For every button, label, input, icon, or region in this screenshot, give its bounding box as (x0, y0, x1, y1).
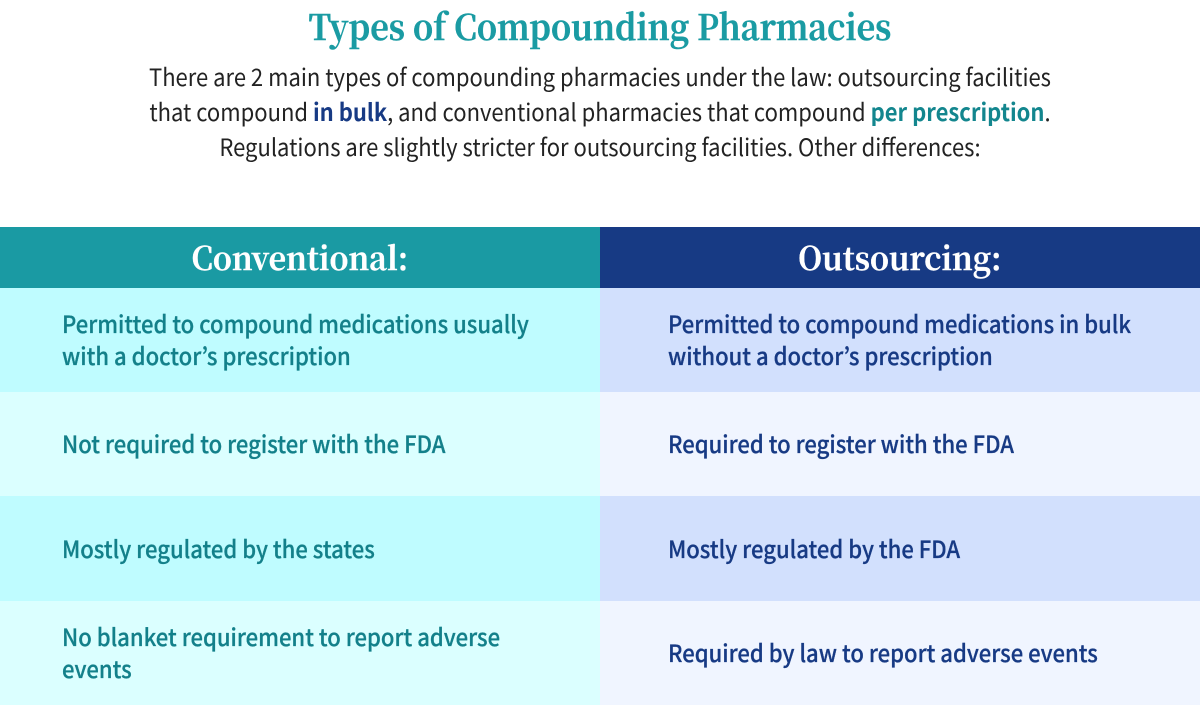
column heading: Conventional: Conventional: (192, 234, 408, 280)
row 3 conventional (0, 496, 600, 601)
row 1 outsourcing: Permitted to compound medications in bulk (668, 305, 1131, 340)
intro text: There are 2 main types of compounding pharmacies under the law: outsourcing facilities (149, 58, 1051, 93)
row 4 conventional (0, 601, 600, 705)
column heading: Outsourcing (600, 227, 1200, 288)
column heading: Outsourcing: Outsourcing: (798, 234, 1002, 280)
row 1 conventional: with a doctor’s prescription (62, 337, 351, 372)
row 2 outsourcing (600, 392, 1200, 496)
row 4 conventional: No blanket requirement to report adverse (62, 618, 500, 653)
row 3 outsourcing: Mostly regulated by the FDA (668, 530, 960, 565)
row 4 conventional: events (62, 650, 132, 685)
intro text: that compound in bulk, and conventional pharmacies that compound per prescription. (149, 93, 1051, 128)
row 4 outsourcing (600, 601, 1200, 705)
row 2 outsourcing: Required to register with the FDA (668, 425, 1014, 460)
row 2 conventional: Not required to register with the FDA (62, 425, 445, 460)
intro text: Regulations are slightly stricter for outsourcing facilities. Other differences: (219, 128, 981, 163)
row 3 outsourcing (600, 496, 1200, 601)
intro text (149, 58, 1051, 163)
column heading: Conventional (0, 227, 600, 288)
title: Types of Compounding Pharmacies (309, 1, 891, 51)
row 1 outsourcing: without a doctor’s prescription (668, 337, 993, 372)
row 3 conventional: Mostly regulated by the states (62, 530, 375, 565)
row 1 conventional (0, 288, 600, 392)
row 1 conventional: Permitted to compound medications usually (62, 305, 529, 340)
row 2 conventional (0, 392, 600, 496)
row 1 outsourcing (600, 288, 1200, 392)
row 4 outsourcing: Required by law to report adverse events (668, 634, 1098, 669)
